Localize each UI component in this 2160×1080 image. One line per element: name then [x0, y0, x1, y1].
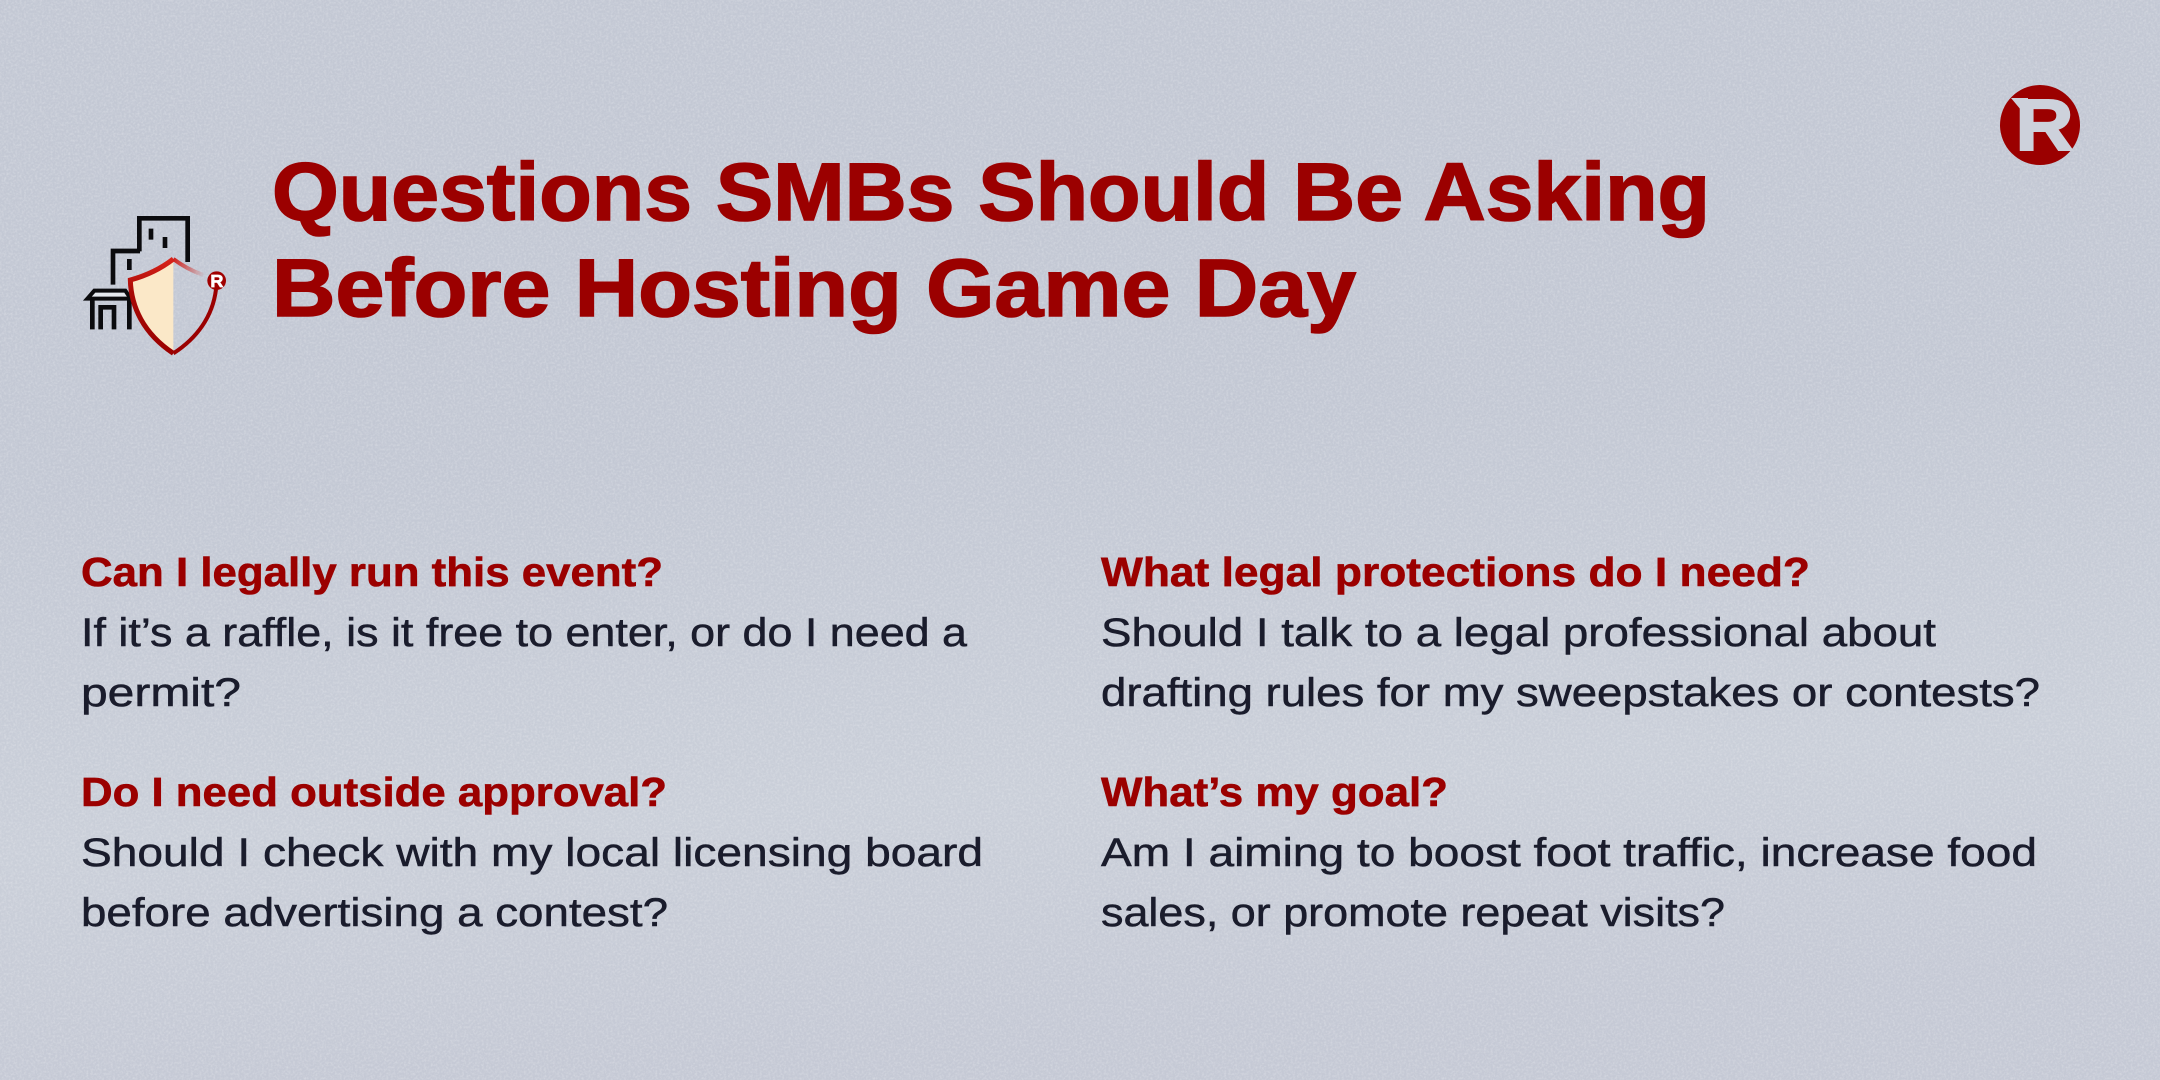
logo: R badge [2000, 85, 2080, 166]
answer text: permit? [81, 671, 241, 715]
answer text: sales, or promote repeat visits? [1101, 891, 1725, 935]
icon: buildings [87, 218, 188, 329]
icon: shield: R [210, 271, 224, 291]
heading: Do I need outside approval? [81, 769, 667, 815]
answer text [1101, 831, 2037, 935]
answer text: Should I talk to a legal professional about [1101, 611, 1936, 655]
title: Questions SMBs Should Be Asking [272, 147, 1710, 238]
answer text: drafting rules for my sweepstakes or contests? [1101, 671, 2040, 715]
title: Before Hosting Game Day [272, 243, 1356, 334]
title [272, 147, 1710, 334]
heading: Can I legally run this event? [81, 549, 663, 595]
answer text: If it’s a raffle, is it free to enter, or do I need a [81, 611, 968, 655]
question block: legally run [81, 549, 968, 715]
answer text [1101, 611, 2040, 715]
heading: What’s my goal? [1101, 769, 1448, 815]
logo: R badge: R [2016, 86, 2074, 166]
answer text: Am I aiming to boost foot traffic, increase food [1101, 831, 2037, 875]
question block: outside approval [81, 769, 983, 935]
answer text: before advertising a contest? [81, 891, 668, 935]
answer text [81, 831, 983, 935]
icon: buildings with shield [87, 218, 226, 353]
question block: legal protections [1101, 549, 2040, 715]
answer text [81, 611, 968, 715]
question block: goal [1101, 769, 2037, 935]
answer text: Should I check with my local licensing board [81, 831, 983, 875]
heading: What legal protections do I need? [1101, 549, 1810, 595]
